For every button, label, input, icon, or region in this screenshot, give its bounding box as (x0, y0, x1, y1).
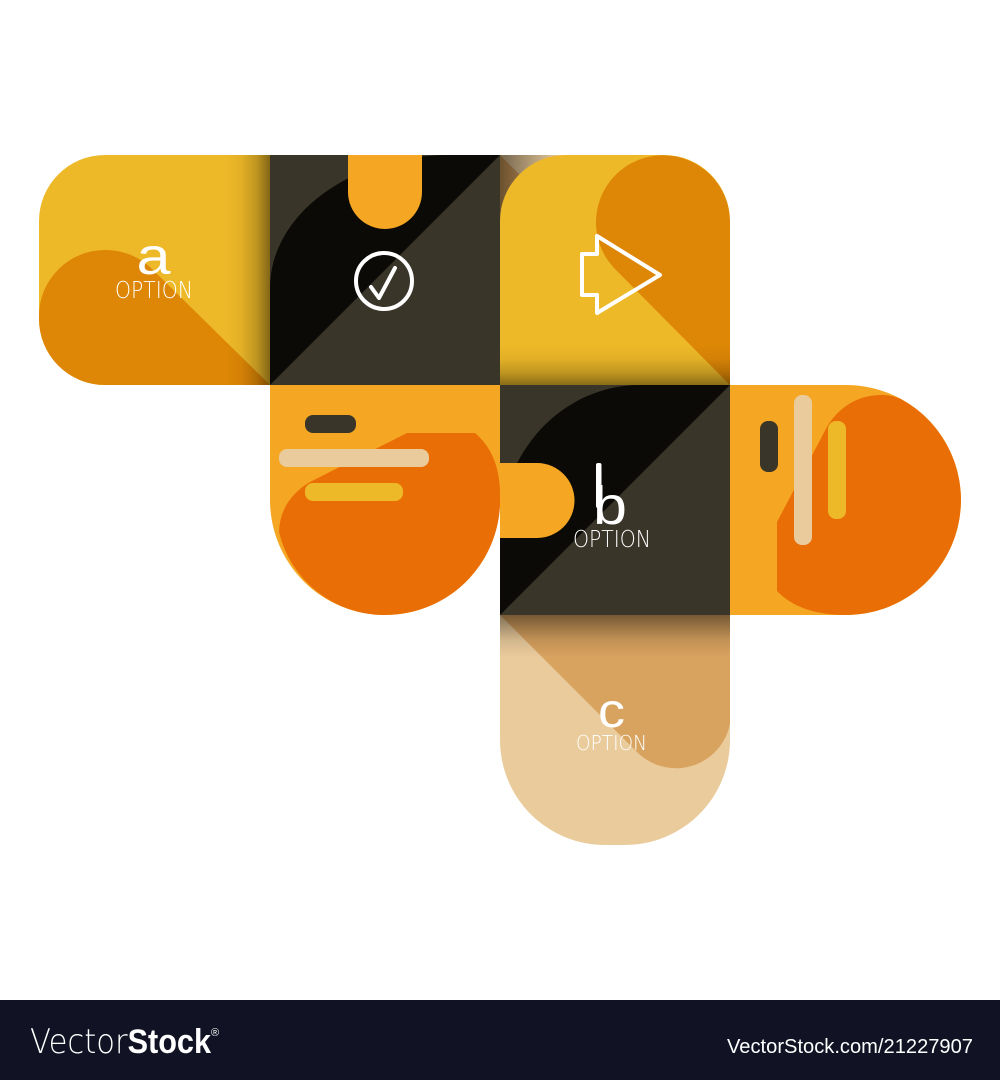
panel: text bars horizontal (270, 385, 500, 615)
panel: vertical bars (730, 385, 961, 615)
logo: VectorStock: VectorStock (30, 1022, 211, 1062)
panel: cream corner behind arrow panel (500, 155, 570, 221)
bar: yellow (828, 421, 846, 519)
panel: check square (270, 155, 500, 385)
logo: registered mark: ® (211, 1027, 219, 1039)
panel: option b (500, 385, 730, 615)
tab: top orange pill (348, 155, 422, 229)
bar: cream (794, 395, 812, 545)
icon: check circle (356, 253, 412, 309)
label: b: b (593, 476, 627, 536)
bar: cream (279, 449, 429, 467)
panel: option a (39, 155, 270, 385)
label: option a: OPTION (115, 278, 193, 304)
label: c: c (598, 685, 625, 738)
footer id text: VectorStock.com/21227907 (727, 1035, 973, 1058)
bar: yellow (305, 483, 403, 501)
label: option c: OPTION (576, 731, 647, 755)
tab: side orange pill (500, 463, 574, 538)
icon: outline arrow (582, 236, 660, 313)
label: b ascender (596, 463, 602, 508)
label: a: a (136, 228, 171, 286)
bar: dark (305, 415, 356, 433)
panel: option c (500, 615, 731, 845)
panel: arrow (500, 155, 730, 385)
bar: dark (760, 421, 778, 472)
label: option b: OPTION (573, 527, 651, 553)
footer band (0, 1000, 1000, 1080)
